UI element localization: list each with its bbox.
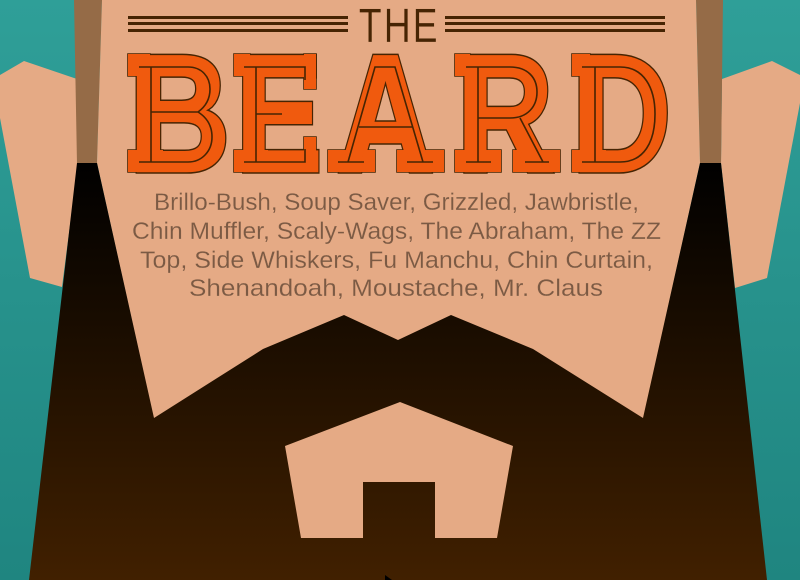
- beard: [29, 163, 767, 580]
- left sideburn: [74, 0, 102, 164]
- fill layer: A: [338, 22, 433, 206]
- outline layer: R: [457, 22, 553, 206]
- outline layer: A: [338, 22, 433, 206]
- fill layer: B: [129, 22, 230, 206]
- right sideburn: [696, 0, 723, 164]
- right ear: [721, 61, 800, 288]
- list of beard names: Shenandoah, Moustache, Mr. Claus: [189, 275, 603, 302]
- list of beard names: [132, 189, 661, 302]
- fill layer: E: [236, 22, 322, 206]
- left ear: [0, 61, 78, 287]
- list of beard names: Top, Side Whiskers, Fu Manchu, Chin Curtain,: [140, 247, 653, 274]
- face: [97, 0, 700, 420]
- outline layer: [128, 22, 671, 206]
- fill layer: R: [457, 22, 553, 206]
- outline layer: E: [236, 22, 322, 206]
- left triple rule: [128, 16, 348, 32]
- fill layer: D: [572, 22, 671, 206]
- outline layer: D: [572, 22, 671, 206]
- mouth: [285, 402, 513, 538]
- small dark mark at chin: [385, 575, 392, 580]
- heading: the: [128, 0, 665, 53]
- word the: THE: [359, 0, 438, 53]
- outline layer: B: [129, 22, 230, 206]
- right triple rule: [445, 16, 665, 32]
- heading: beard: [128, 22, 671, 206]
- list of beard names: Brillo-Bush, Soup Saver, Grizzled, Jawbristle,: [154, 189, 639, 216]
- list of beard names: Chin Muffler, Scaly-Wags, The Abraham, The ZZ: [132, 218, 661, 245]
- fill layer: [128, 22, 671, 206]
- inline strokes on beard lettering: [139, 67, 655, 162]
